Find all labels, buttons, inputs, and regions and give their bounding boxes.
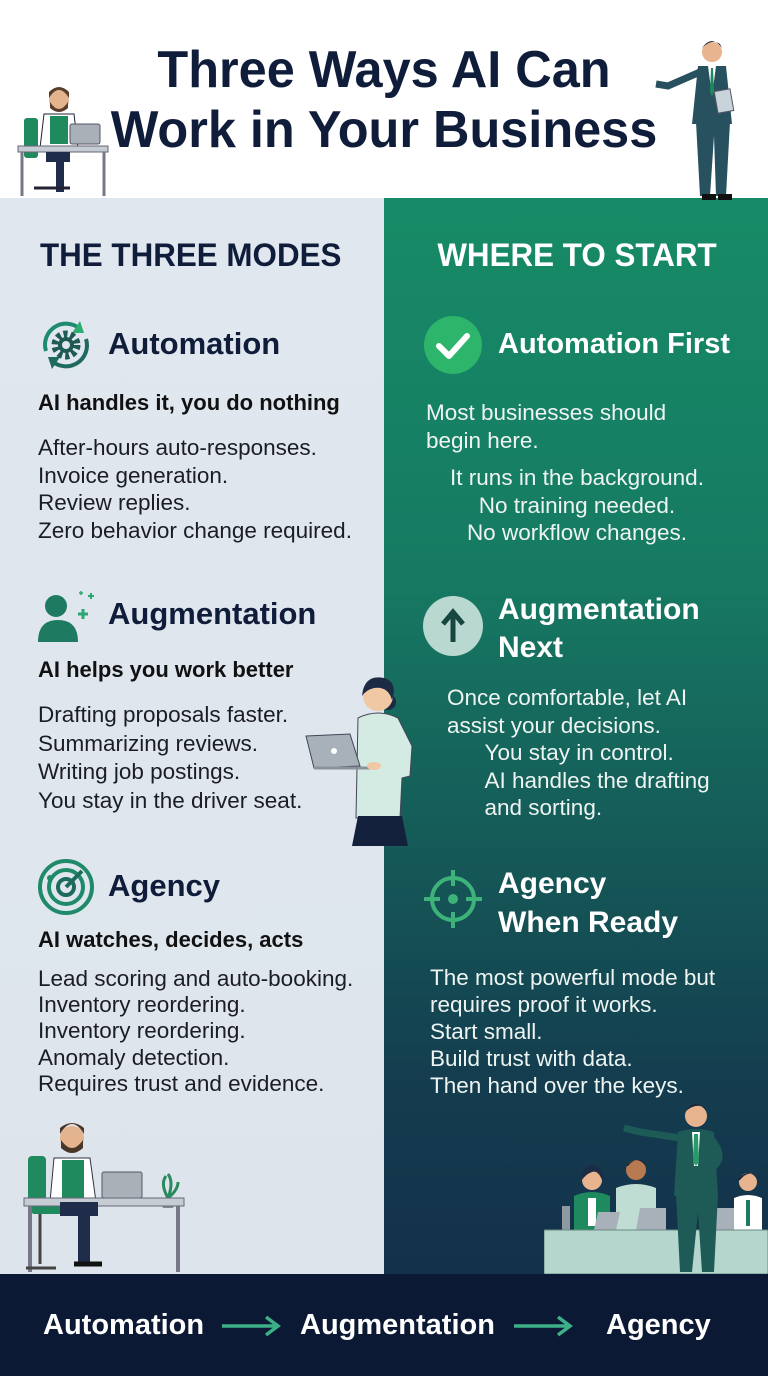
footer: automation: Automation: [43, 1309, 204, 1341]
panel: augmentation next: [423, 593, 710, 820]
heading: where to start: WHERE TO START: [437, 237, 717, 273]
illustration: presenter top-right: [655, 41, 734, 200]
title: Three Ways AI Can: [157, 41, 611, 99]
illustration: man at desk top-left: [18, 87, 108, 196]
illustration: woman with laptop: [305, 677, 412, 846]
panel: agency: [38, 859, 353, 1096]
subheading: AI handles it, you do nothing: [38, 390, 340, 415]
panel: automation: [38, 321, 352, 542]
arrow: [514, 1316, 573, 1336]
text block: and sorting.: [484, 795, 602, 820]
subheading: AI helps you work better: [38, 657, 294, 682]
text block: centered: It runs in the background.: [450, 465, 704, 490]
heading: agency when ready: When Ready: [498, 906, 678, 939]
text block: begin here.: [426, 428, 539, 453]
heading: augmentation next: Augmentation: [498, 593, 700, 626]
text block: You stay in control.: [484, 740, 674, 765]
text block: AI handles the drafting: [484, 768, 710, 792]
heading: augmentation next: [498, 593, 700, 664]
footer bar: [0, 1274, 768, 1376]
text block: centered: No training needed.: [479, 492, 675, 518]
text block: Review replies.: [38, 490, 191, 515]
text block: Lead scoring and auto-booking.: [38, 966, 353, 991]
text block: Inventory reordering.: [38, 1018, 246, 1043]
text block: [38, 966, 353, 1096]
text block: Zero behavior change required.: [38, 518, 352, 542]
text block: assist your decisions.: [447, 712, 661, 738]
text block: Build trust with data.: [430, 1046, 633, 1071]
panel: automation first: [424, 316, 730, 545]
text block: Inventory reordering.: [38, 992, 246, 1017]
heading: augmentation next: Next: [498, 631, 563, 664]
text block: [447, 685, 710, 820]
right panel: [384, 198, 768, 1274]
heading: agency when ready: [498, 867, 678, 939]
text block: You stay in the driver seat.: [38, 788, 302, 813]
text block: centered: [450, 465, 704, 545]
text block: After-hours auto-responses.: [38, 435, 317, 460]
text block: Requires trust and evidence.: [38, 1071, 324, 1096]
header background: [0, 0, 768, 198]
subheading: AI watches, decides, acts: [38, 927, 303, 952]
heading: the three modes: THE THREE MODES: [40, 237, 341, 273]
text block: Writing job postings.: [38, 759, 240, 784]
icon: check circle: [424, 316, 482, 374]
panel: agency when ready: [424, 867, 715, 1098]
icon: radar target: [38, 859, 94, 915]
text block: [38, 702, 302, 813]
text block: The most powerful mode but: [430, 965, 715, 990]
heading: agency when ready: Agency: [498, 867, 606, 900]
arrow: [222, 1316, 281, 1336]
heading: automation first: Automation First: [498, 328, 730, 360]
text block: Anomaly detection.: [38, 1045, 229, 1070]
text block: requires proof it works.: [430, 992, 658, 1017]
panel: augmentation: [38, 591, 316, 813]
icon: gear with arrows: [43, 321, 89, 369]
heading: automation: Automation: [108, 326, 280, 361]
text block: Drafting proposals faster.: [38, 702, 288, 727]
footer: augmentation: Augmentation: [300, 1309, 495, 1341]
heading: augmentation: Augmentation: [108, 596, 316, 631]
illustration: team meeting: [544, 1104, 768, 1274]
text block: [426, 400, 666, 453]
text block: Summarizing reviews.: [38, 731, 258, 756]
text block: [38, 435, 352, 542]
title: Work in Your Business: [111, 101, 657, 159]
illustration: man at desk bottom-left: [24, 1123, 184, 1272]
text block: Then hand over the keys.: [430, 1073, 684, 1098]
text block: [430, 965, 715, 1098]
icon: up arrow circle: [423, 596, 483, 656]
text block: Most businesses should: [426, 400, 666, 425]
text block: Invoice generation.: [38, 462, 228, 488]
icon: person with sparkles: [38, 591, 94, 642]
icon: crosshair: [424, 870, 482, 928]
text block: Start small.: [430, 1019, 543, 1044]
text block: centered: No workflow changes.: [467, 520, 687, 545]
footer: agency: Agency: [606, 1309, 711, 1341]
text block: Once comfortable, let AI: [447, 685, 687, 710]
heading: agency: Agency: [108, 868, 220, 903]
left panel: [0, 198, 384, 1274]
title: [110, 41, 657, 159]
